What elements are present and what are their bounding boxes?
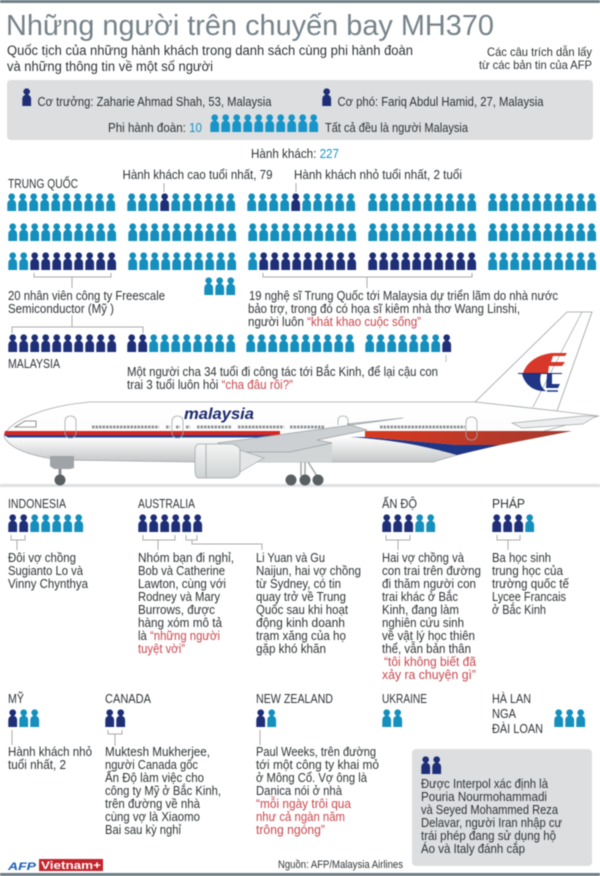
section: Australia: Burrows, được	[138, 602, 215, 617]
section: Netherlands, Russia, Taiwan	[492, 691, 585, 736]
main landing gear	[301, 462, 317, 476]
section: India: “tôi không biết đã	[384, 654, 477, 669]
section: Australia: từ Sydney, có tin	[256, 576, 341, 591]
section: Netherlands, Russia, Taiwan: HÀ LAN	[492, 691, 531, 706]
section: Australia: tuyệt vời”	[138, 641, 185, 656]
section: New Zealand: NEW ZEALAND	[256, 691, 333, 706]
text: father from Malaysia	[127, 364, 438, 392]
section: Indonesia: INDONESIA	[8, 496, 66, 511]
icon: first officer	[322, 88, 331, 106]
panel: stolen passports: Được Interpol xác định là	[421, 776, 549, 791]
section: Canada: người Canada gốc	[105, 757, 198, 772]
first officer text: Cơ phó: Fariq Abdul Hamid, 27, Malaysia	[338, 94, 544, 109]
section: India: đi thăm người con	[382, 576, 476, 591]
section: New Zealand: như cả ngàn năm	[256, 809, 345, 824]
section: France: trường quốc tế	[492, 576, 570, 591]
section: Canada: Muktesh Mukherjee,	[105, 744, 210, 759]
section: United States: MỸ	[8, 691, 24, 706]
logo: Vietnam+: Vietnam+	[41, 860, 101, 872]
section: Ukraine	[382, 691, 427, 727]
wing	[218, 418, 403, 452]
panel: stolen passports: Áo và Italy đánh cắp	[421, 841, 525, 856]
section: Canada	[105, 691, 221, 837]
section: New Zealand: Danica nói ở nhà	[256, 783, 343, 798]
stabilizer	[512, 416, 596, 428]
section: France: Lycee Francais	[492, 589, 566, 604]
panel: stolen passports: Delavar, người Iran nhập cư	[421, 815, 562, 830]
section: Canada: Ấn Độ làm việc cho	[105, 770, 204, 785]
section: Australia: hàng xóm mô tả	[138, 615, 223, 630]
source: Nguồn: AFP/Malaysia Airlines	[278, 859, 403, 871]
bracket: Freescale employees	[12, 273, 143, 333]
section: Australia: Nhóm bạn đi nghỉ,	[138, 550, 234, 565]
section: New Zealand: ở Mông Cổ. Vợ ông là	[256, 770, 368, 785]
source note: Các câu trích dẫn lấy	[487, 44, 592, 59]
wing fairing	[232, 443, 332, 462]
section: Canada: CANADA	[105, 691, 151, 706]
section: Australia: Rodney và Mary	[138, 589, 220, 604]
section: New Zealand: Paul Weeks, trên đường	[256, 744, 376, 759]
section: India: thể, vẫn bản thân	[382, 641, 471, 656]
text: Chinese artists: 19 nghệ sĩ Trung Quốc tới Malaysia dự triển lãm do nhà nước	[249, 288, 558, 303]
section: United States: tuổi nhất, 2	[8, 757, 66, 772]
text: Chinese artists: bảo trợ, trong đó có họa sĩ kiêm nhà thơ Wang Linshi,	[248, 301, 520, 316]
text: Freescale employees	[8, 288, 165, 316]
section: New Zealand: tới một công ty khai mỏ	[256, 757, 379, 772]
section: Australia: động kinh doanh	[256, 615, 345, 630]
windows	[92, 426, 465, 428]
section: India: Hai vợ chồng và	[382, 550, 465, 565]
bracket: Chinese artists	[263, 273, 472, 288]
passenger count: Hành khách: 227	[251, 146, 339, 161]
text: father from Malaysia: trai 3 tuổi luôn hỏi “cha đâu rồi?”	[127, 377, 293, 392]
section: Canada: Bai sau kỳ nghỉ	[105, 822, 181, 837]
section: Canada: công ty Mỹ ở Bắc Kinh,	[105, 783, 221, 798]
fuselage stripes	[4, 431, 280, 435]
section: Australia: là “những người	[138, 628, 220, 643]
icon: captain	[22, 88, 31, 106]
doors	[65, 416, 477, 440]
section: New Zealand: “mỗi ngày trôi qua	[256, 796, 352, 811]
section: France: Ba học sinh	[492, 550, 551, 565]
source note	[479, 44, 592, 72]
section: Australia: trạm xăng của họ	[256, 628, 346, 643]
section: India	[382, 496, 481, 682]
cockpit window	[15, 421, 36, 427]
tail fin	[475, 312, 592, 411]
section: United States: Hành khách nhỏ	[8, 744, 92, 759]
panel: stolen passports: và Seyed Mohammed Reza	[421, 802, 559, 817]
captain text: Cơ trưởng: Zaharie Ahmad Shah, 53, Malaysia	[38, 94, 272, 109]
callout: youngest passenger: Hành khách nhỏ tuổi nhất, 2 tuổi	[294, 167, 462, 182]
section: Australia: Lawton, cùng với	[138, 576, 226, 591]
ground line	[0, 484, 600, 487]
section: India: trai khác ở Bắc	[382, 589, 458, 604]
subtitle	[7, 43, 413, 74]
section: United States	[8, 691, 92, 772]
section: Indonesia: Vinny Chynthya	[8, 576, 89, 591]
panel: stolen passports	[412, 749, 592, 866]
title: Những người trên chuyến bay MH370	[6, 10, 494, 42]
crew count: Phi hành đoàn: 10	[108, 120, 202, 135]
section: New Zealand: trông ngóng”	[256, 822, 325, 837]
section: Australia: Li Yuan và Gu	[256, 550, 325, 565]
section: France: ở Bắc Kinh	[492, 602, 546, 617]
logo: AFP: AFP	[7, 861, 37, 873]
section: France: PHÁP	[492, 496, 525, 511]
section: Australia: AUSTRALIA	[138, 496, 195, 511]
text: Chinese artists: người luôn “khát khao cuộc sống”	[248, 314, 421, 329]
section: India: về vật lý học thiên	[382, 628, 475, 643]
airline name: malaysia	[184, 406, 254, 423]
section: Indonesia	[8, 496, 89, 591]
section: Canada: trên đường về nhà	[105, 796, 201, 811]
text: father from Malaysia: Một người cha 34 tuổi đi công tác tới Bắc Kinh, để lại cậu con	[127, 364, 438, 379]
text: Chinese artists	[248, 288, 558, 329]
text: Freescale employees: Semiconductor (Mỹ )	[8, 301, 114, 316]
section: India: nghiên cứu sinh	[382, 615, 464, 630]
section: Ukraine: UKRAINE	[382, 691, 427, 706]
section: Australia: Quốc sau khi hoạt	[256, 602, 348, 617]
section: India: con trai trên đường	[382, 563, 481, 578]
panel: stolen passports: Pouria Nourmohammadi	[421, 789, 547, 804]
section: Netherlands, Russia, Taiwan: ĐÀI LOAN	[492, 721, 543, 736]
nose gear	[50, 456, 74, 469]
icons: ten crew members	[210, 114, 318, 132]
crew nationality: Tất cả đều là người Malaysia	[325, 120, 469, 135]
section: Australia: Naijun, hai vợ chồng	[256, 563, 361, 578]
panel: stolen passports: trái phép đang sử dụng hộ	[421, 828, 556, 843]
section: Indonesia: Sugianto Lo và	[8, 563, 84, 578]
section: Indonesia: Đôi vợ chồng	[8, 550, 76, 565]
section: Australia: Bob và Catherine	[138, 563, 225, 578]
section: Netherlands, Russia, Taiwan: NGA	[492, 706, 516, 721]
label: Malaysia: MALAYSIA	[8, 356, 60, 371]
source note: từ các bản tin của AFP	[479, 58, 592, 72]
fuselage	[4, 402, 599, 462]
section: New Zealand	[256, 691, 379, 837]
subtitle: và những thông tin về một số người	[7, 59, 213, 74]
section: India: Kinh, đang làm	[382, 602, 459, 617]
section: Canada: cùng vợ là Xiaomo	[105, 809, 200, 824]
callout: oldest passenger: Hành khách cao tuổi nhất, 79	[122, 167, 272, 182]
label: China: TRUNG QUỐC	[8, 176, 78, 191]
section: Australia: quay trở về Trung	[256, 589, 346, 604]
panel: flight crew	[7, 80, 593, 140]
pictogram: Malaysia passengers	[8, 334, 451, 352]
section: India: xảy ra chuyện gì”	[382, 667, 476, 682]
section: France: trung học của	[492, 563, 564, 578]
section: Australia: gặp khó khăn	[256, 641, 326, 656]
section: France	[492, 496, 570, 617]
engine	[195, 444, 264, 478]
pictogram: China passengers	[7, 193, 596, 295]
text: Freescale employees: 20 nhân viên công ty Freescale	[8, 288, 165, 303]
illustration: Malaysia Airlines plane	[4, 312, 599, 486]
section: Australia	[138, 496, 361, 656]
section: India: ẤN ĐỘ	[382, 496, 417, 511]
tail logo	[518, 353, 567, 391]
subtitle: Quốc tịch của những hành khách trong danh sách cùng phi hành đoàn	[7, 43, 413, 58]
